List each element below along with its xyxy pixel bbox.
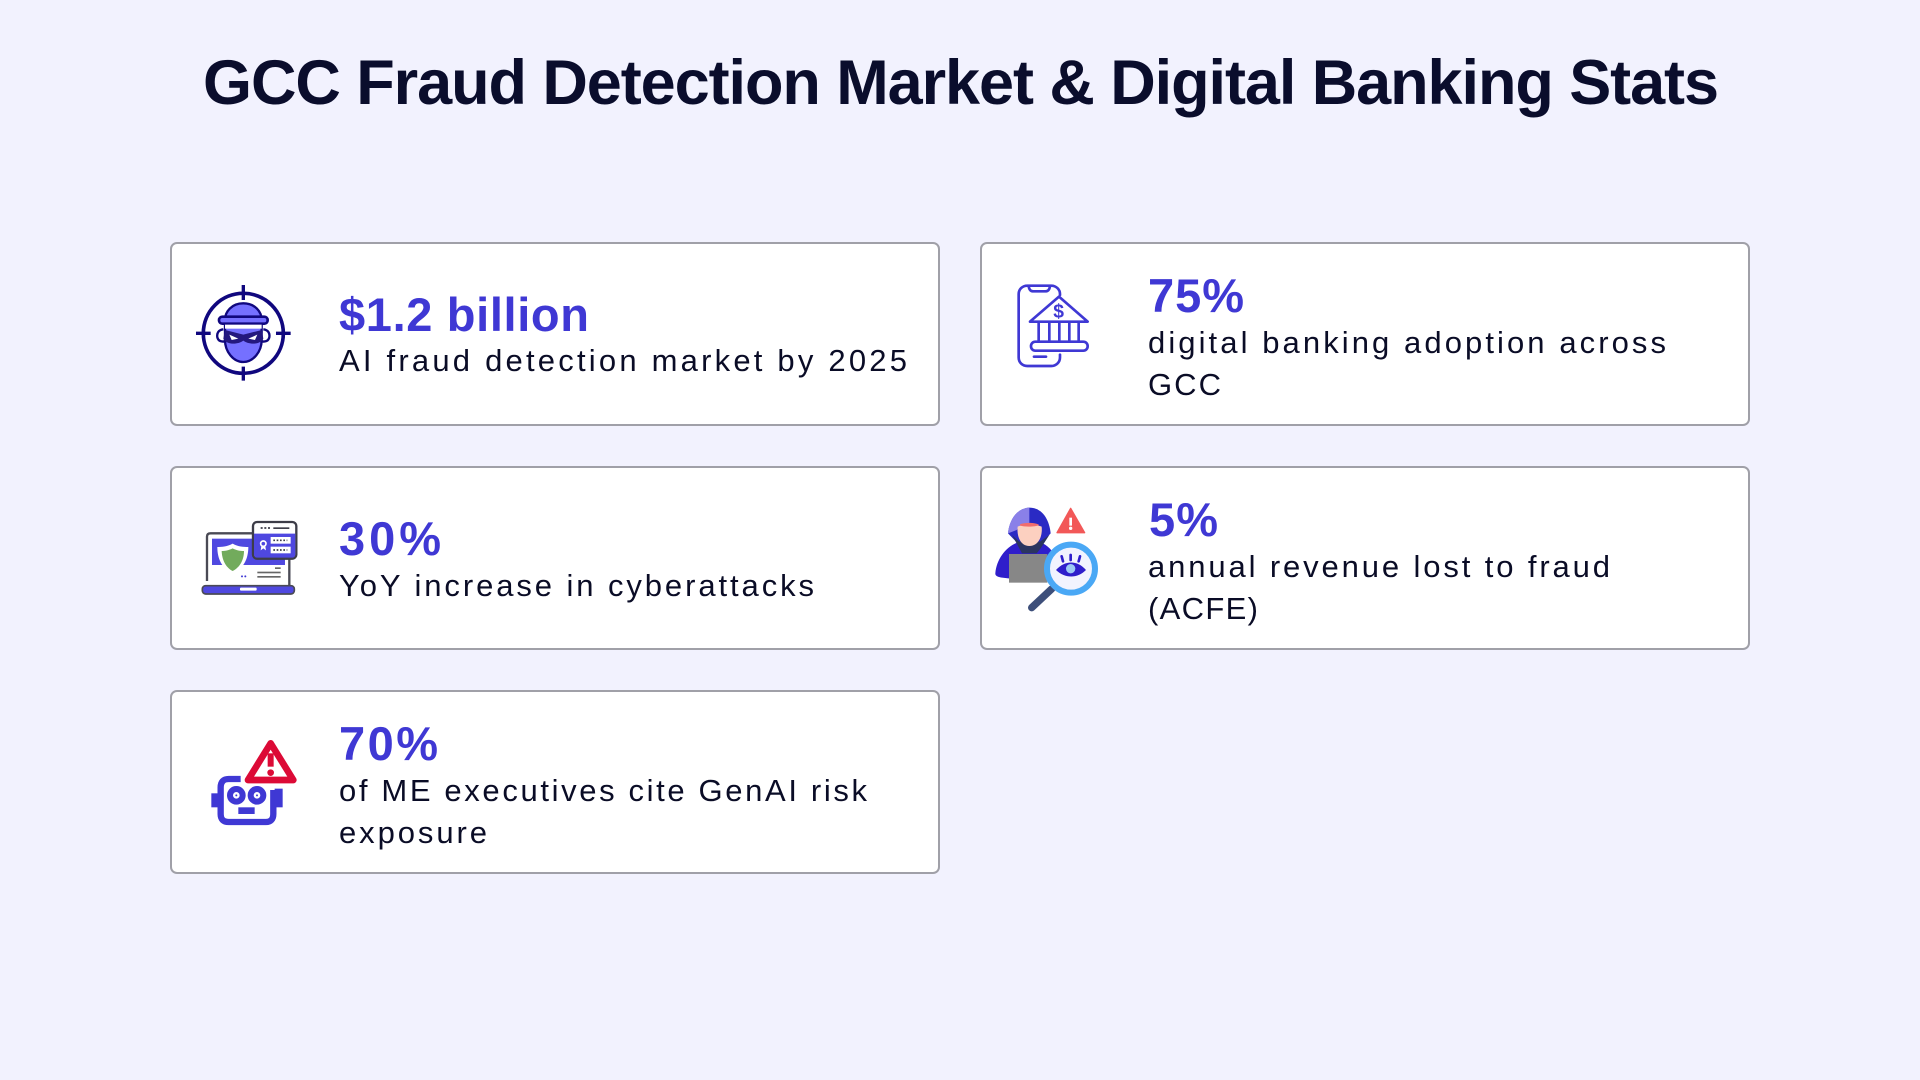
- description: digital banking adoption: GCC: [1148, 367, 1221, 402]
- panel: market size: [171, 243, 939, 425]
- description: annual revenue lost: (ACFE): [1148, 591, 1258, 626]
- icon: phone with bank: [1019, 286, 1088, 366]
- icon: robot with warning: [211, 743, 293, 822]
- icon: laptop with shield: [202, 522, 296, 594]
- description: AI fraud detection market: AI fraud detection market by 2025: [339, 343, 907, 378]
- stat: 30%: 30%: [339, 512, 441, 565]
- icon: hacker and magnifier: [995, 508, 1095, 608]
- description: annual revenue lost: annual revenue lost to fraud: [1148, 549, 1610, 584]
- panel: digital banking adoption: [981, 243, 1749, 425]
- description: digital banking adoption: digital banking adoption across: [1148, 325, 1666, 360]
- description: YoY increase: YoY increase in cyberattacks: [339, 568, 814, 603]
- description: GenAI risk: of ME executives cite GenAI risk: [339, 773, 868, 808]
- icon: phone with bank: $: [1053, 301, 1064, 322]
- description: digital banking adoption: [1148, 325, 1666, 402]
- description: annual revenue lost: [1148, 549, 1610, 626]
- panel: GenAI risk: [171, 691, 939, 873]
- panel: cyberattacks: [171, 467, 939, 649]
- stat: 70%: 70%: [339, 717, 438, 770]
- stat: 5%: 5%: [1149, 493, 1218, 546]
- title: GCC Fraud Detection Market & Digital Banking Stats: [203, 48, 1719, 118]
- stat: $1.2 billion: $1.2 billion: [339, 288, 589, 341]
- description: GenAI risk: exposure: [339, 815, 487, 850]
- stat: 75%: 75%: [1148, 269, 1244, 322]
- panel: revenue lost: [981, 467, 1749, 649]
- icon: masked thief in crosshair: [196, 285, 291, 381]
- description: GenAI risk: [339, 773, 868, 850]
